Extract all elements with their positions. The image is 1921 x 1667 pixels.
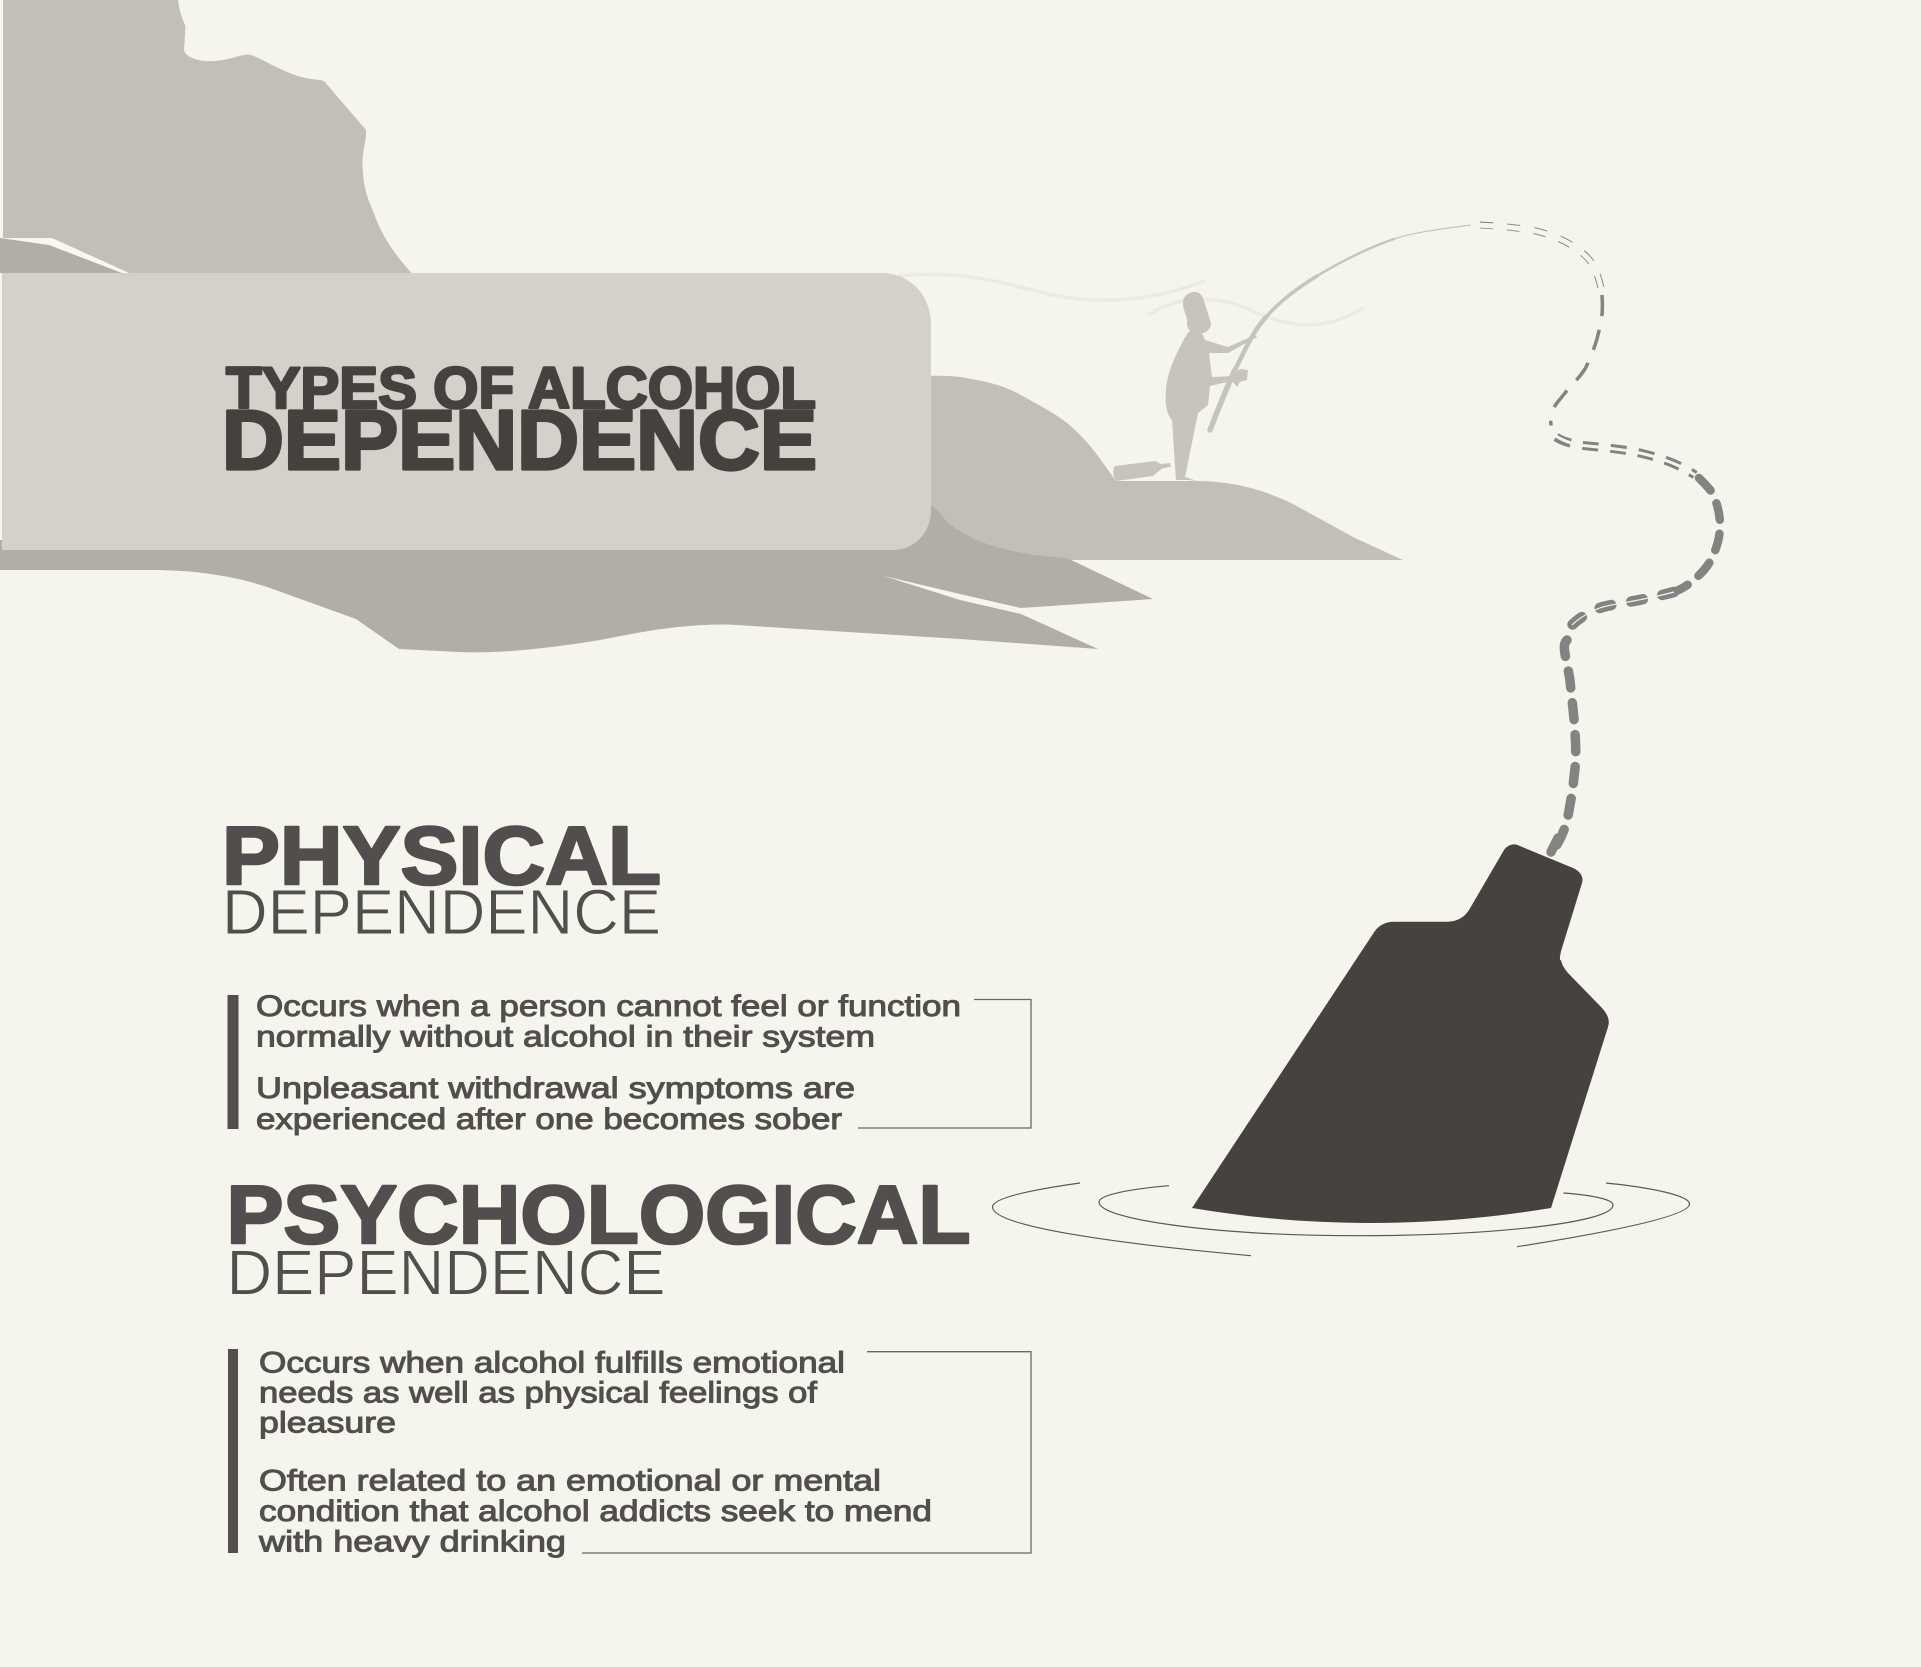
heading: psychological: PSYCHOLOGICAL [226, 1168, 971, 1261]
fisherman silhouette [1166, 225, 1470, 481]
accent bar [228, 995, 238, 1129]
body text: Occurs when alcohol fulfills emotional [259, 1346, 845, 1380]
title: dependence: DEPENDENCE [222, 393, 817, 487]
body text: experienced after one becomes sober [256, 1103, 842, 1136]
body text: pleasure [259, 1406, 396, 1440]
bottle in water [1192, 844, 1609, 1223]
heading: physical: PHYSICAL [222, 809, 661, 902]
cliff [3, 0, 412, 290]
title: types of alcohol: TYPES OF ALCOHOL [226, 356, 816, 421]
subheading: dependence: DEPENDENCE [222, 876, 661, 948]
body text: needs as well as physical feelings of [259, 1376, 818, 1410]
body text: Unpleasant withdrawal symptoms are [256, 1072, 855, 1105]
bracket [858, 1000, 1031, 1128]
bracket [582, 1352, 1031, 1553]
water ripples [992, 1183, 1690, 1256]
rock shelf under the cliff [0, 238, 129, 273]
fishing line [1476, 225, 1720, 853]
lower rock mass [0, 505, 1153, 652]
subheading: dependence: DEPENDENCE [226, 1236, 666, 1308]
body text: condition that alcohol addicts seek to mend [259, 1495, 932, 1528]
body text: Occurs when a person cannot feel or function [256, 990, 961, 1023]
title banner [2, 273, 931, 550]
body text: Often related to an emotional or mental [259, 1464, 881, 1498]
body text [258, 1346, 932, 1558]
small bottle [1113, 461, 1171, 481]
hill with fisherman [900, 376, 1403, 560]
accent bar [228, 1349, 238, 1553]
section: physical dependence [222, 809, 1031, 1136]
body text: with heavy drinking [258, 1526, 566, 1558]
section: psychological dependence [226, 1168, 1031, 1558]
body text: normally without alcohol in their system [256, 1020, 875, 1054]
body text [256, 990, 961, 1136]
wind lines [900, 274, 1363, 325]
fishing rod [1210, 225, 1470, 430]
